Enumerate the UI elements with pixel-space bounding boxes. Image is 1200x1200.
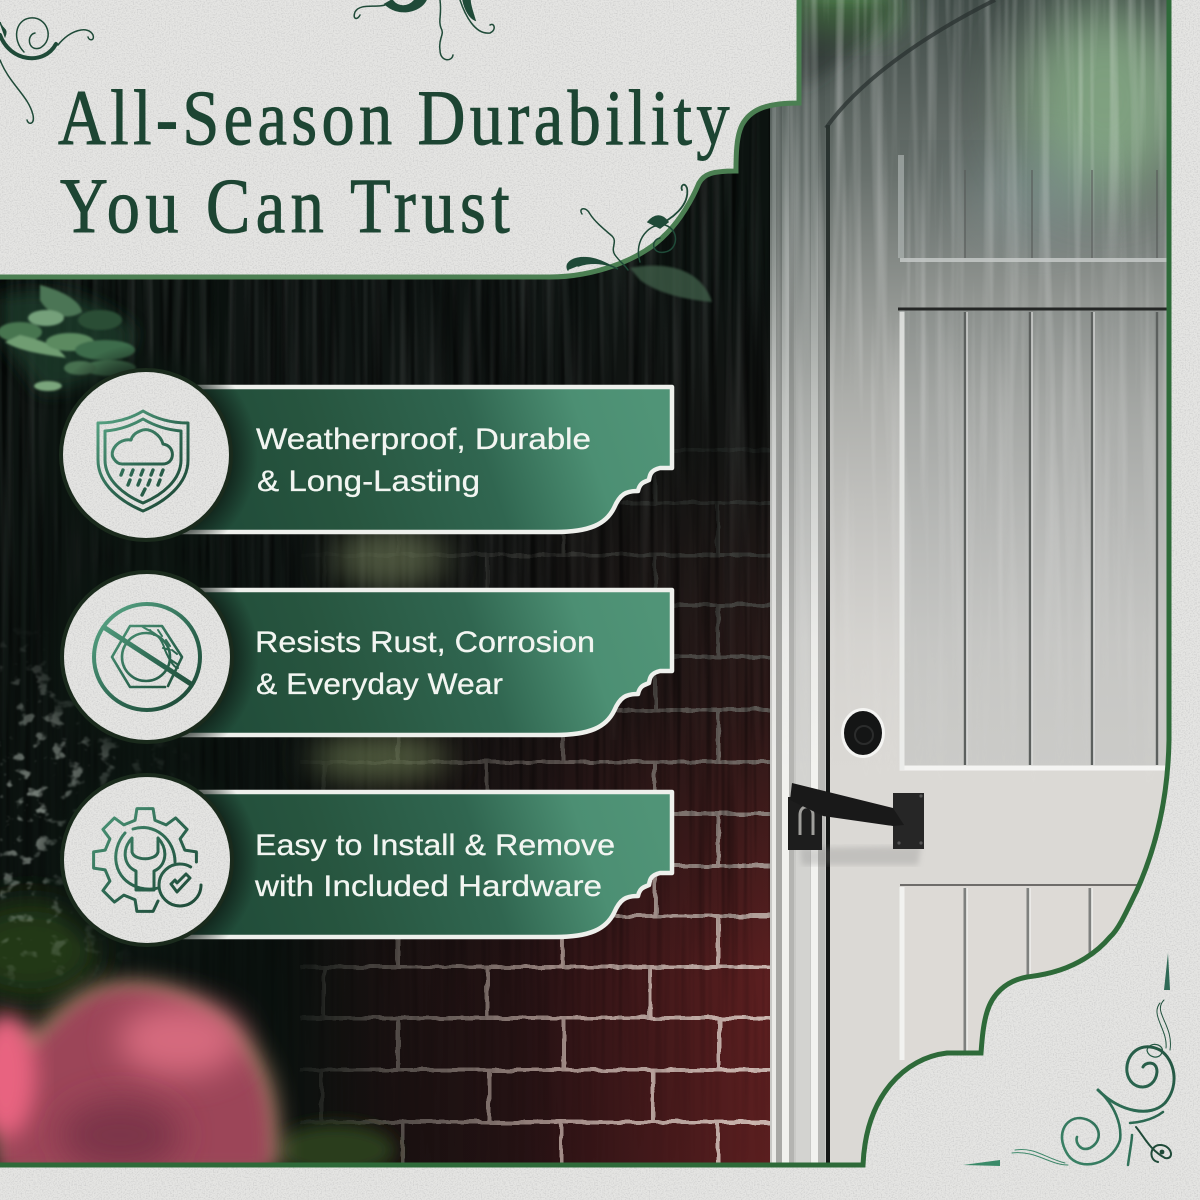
icon: no rust nut xyxy=(94,604,200,710)
feature 2 badge xyxy=(35,545,259,769)
heading xyxy=(58,75,730,249)
feature 1 banner xyxy=(180,387,672,532)
feature 1 text xyxy=(256,423,591,498)
foliage top left xyxy=(0,285,136,392)
feature 2 text: Resists Rust, Corrosion xyxy=(255,626,595,659)
dim foliage left xyxy=(0,632,164,1010)
feature 1 badge xyxy=(34,343,258,567)
barn latch xyxy=(788,783,924,865)
feature 3 text: with Included Hardware xyxy=(254,870,602,903)
foliage under header xyxy=(630,266,712,302)
feature 3 badge xyxy=(35,748,259,972)
feature 1 text: Weatherproof, Durable xyxy=(256,423,591,456)
feature 2 text xyxy=(255,626,595,701)
door frame xyxy=(770,0,832,1170)
door knob xyxy=(841,708,885,758)
door xyxy=(830,0,1175,1170)
pink flower blur xyxy=(0,980,395,1176)
icon: shield with rain cloud xyxy=(98,411,188,511)
ornament: top center flourish xyxy=(354,0,494,60)
ornament: bottom right flourish xyxy=(963,953,1174,1166)
ornament: flourish below heading xyxy=(567,185,687,270)
frame outline upper xyxy=(0,0,799,277)
rain streaks on wall xyxy=(0,116,758,614)
feature 2 text: & Everyday Wear xyxy=(256,668,503,701)
brick wall xyxy=(0,90,772,1170)
icon: gear wrench with check xyxy=(94,809,201,911)
heading: All-Season Durability xyxy=(58,75,730,161)
feature 1 text: & Long-Lasting xyxy=(257,465,480,498)
green reflection xyxy=(790,0,1190,230)
door lighting overlay xyxy=(770,0,1175,1170)
door panels xyxy=(900,140,1170,1170)
ornament: top left flourish xyxy=(0,18,93,123)
feature 3 text xyxy=(254,829,615,903)
feature 3 banner xyxy=(180,792,672,937)
feature 2 banner xyxy=(180,590,672,735)
heading: You Can Trust xyxy=(60,163,510,249)
bokeh highlights xyxy=(310,528,450,780)
feature 3 text: Easy to Install & Remove xyxy=(255,829,615,862)
door panel detail lines xyxy=(826,0,1170,770)
rain streaks on door xyxy=(772,0,1166,656)
